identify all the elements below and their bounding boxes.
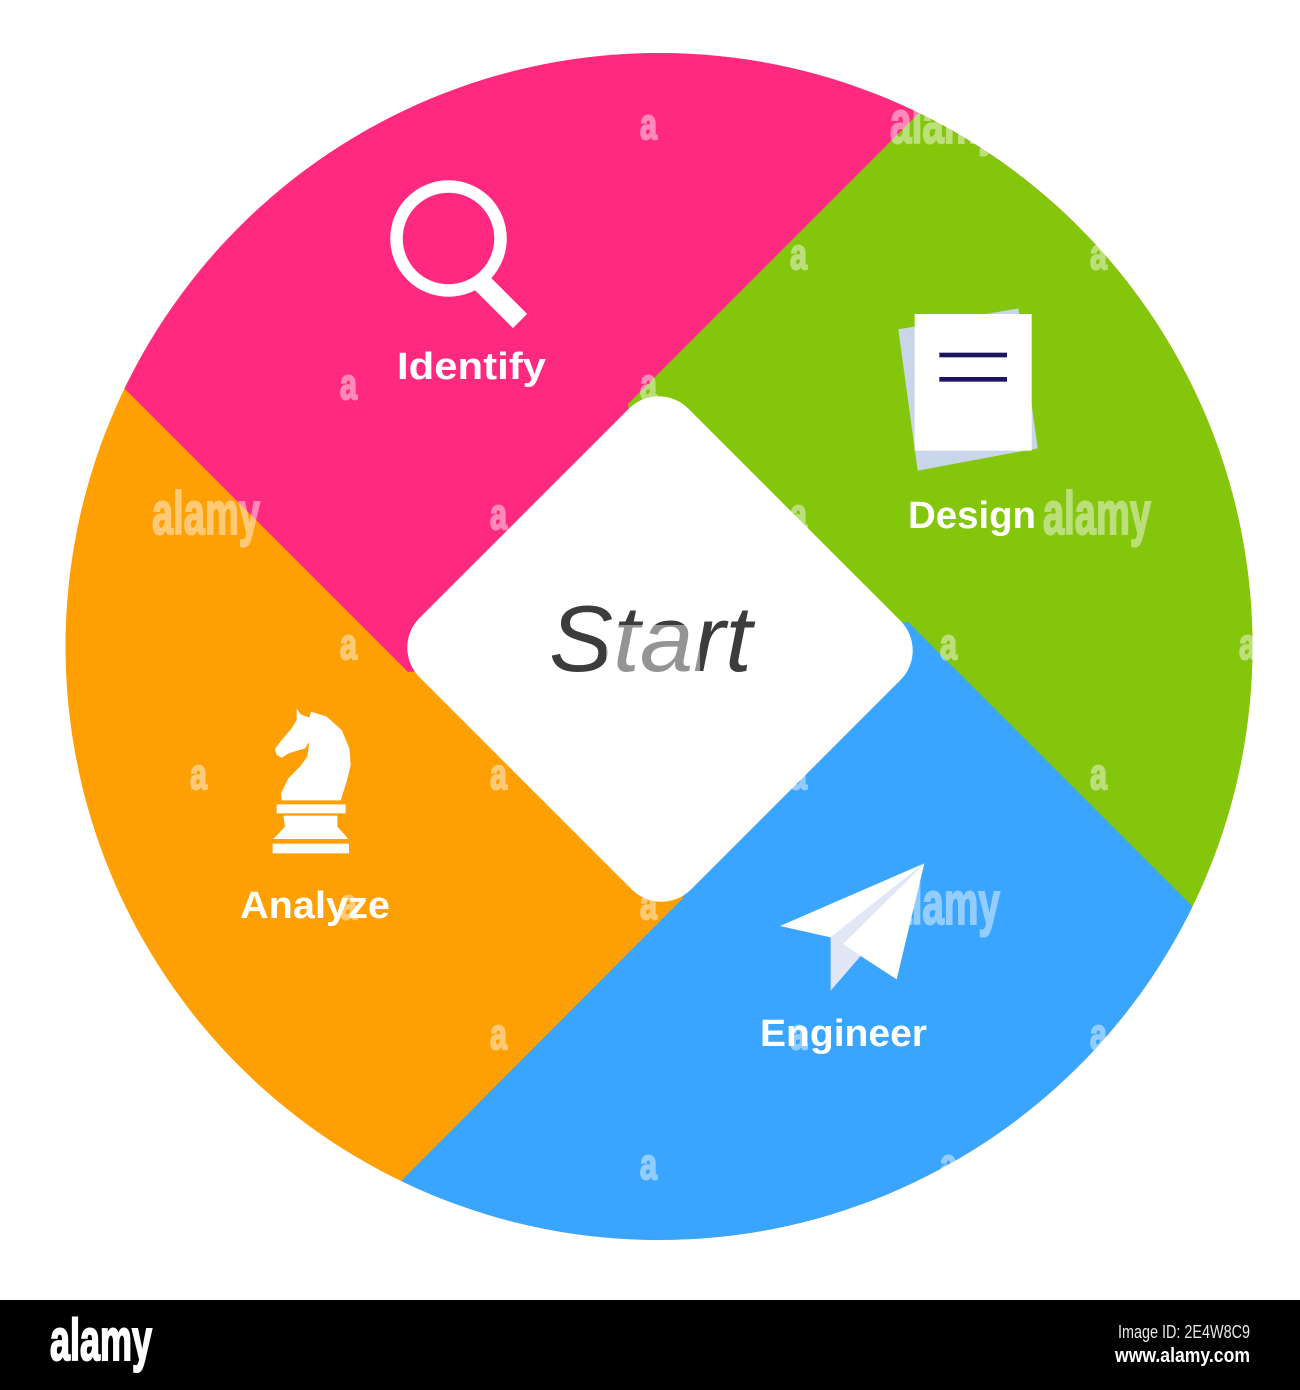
segment: orange	[66, 53, 1252, 1240]
segment: green	[628, 113, 1252, 1072]
watermarks: a	[340, 880, 357, 929]
watermarks: a	[790, 1010, 807, 1059]
watermarks: a	[790, 750, 807, 799]
watermarks	[152, 89, 1256, 1189]
segment: blue	[401, 622, 1192, 1240]
watermarks: a	[640, 880, 657, 929]
footer url: www.alamy.com	[1114, 1345, 1250, 1367]
watermarks: a	[1090, 230, 1107, 279]
watermark behind plane: alamy	[890, 870, 1000, 937]
watermarks: a	[640, 100, 657, 149]
watermark overlay on Start	[606, 625, 700, 672]
footer bar	[0, 1300, 1300, 1390]
icon: magnifying glass	[396, 186, 520, 321]
watermarks: a	[490, 1010, 507, 1059]
label: Identify: Identify	[397, 346, 546, 388]
watermarks: alamy	[890, 89, 1000, 156]
footer image id: Image ID: 2E4W8C9	[1118, 1322, 1250, 1342]
watermarks: a	[640, 1140, 657, 1189]
watermarks: a	[340, 360, 357, 409]
watermarks: a	[790, 490, 807, 539]
watermarks: a	[190, 750, 207, 799]
icon: paper sheets	[898, 308, 1038, 471]
icon: chess knight	[273, 708, 351, 853]
watermarks: a	[340, 620, 357, 669]
label: Design: Design	[908, 495, 1036, 537]
circular cycle wheel	[66, 53, 1252, 1240]
watermarks: a	[490, 750, 507, 799]
label: Analyze: Analyze	[240, 885, 390, 927]
label: Engineer: Engineer	[760, 1013, 927, 1055]
icon: paper plane	[780, 863, 924, 991]
watermarks: a	[940, 620, 957, 669]
center label: Start: Start	[549, 586, 756, 691]
watermarks: a	[1090, 750, 1107, 799]
watermarks: a	[940, 1140, 957, 1189]
footer logo: alamy	[50, 1308, 152, 1373]
watermarks: alamy	[152, 480, 260, 547]
watermarks: a	[640, 360, 657, 409]
center diamond	[390, 379, 930, 919]
watermarks: alamy	[1043, 480, 1151, 547]
watermarks: a	[790, 230, 807, 279]
watermarks: a	[1090, 1010, 1107, 1059]
segment: pink	[124, 53, 1076, 672]
watermarks: a	[490, 490, 507, 539]
watermarks: a	[1239, 620, 1256, 669]
